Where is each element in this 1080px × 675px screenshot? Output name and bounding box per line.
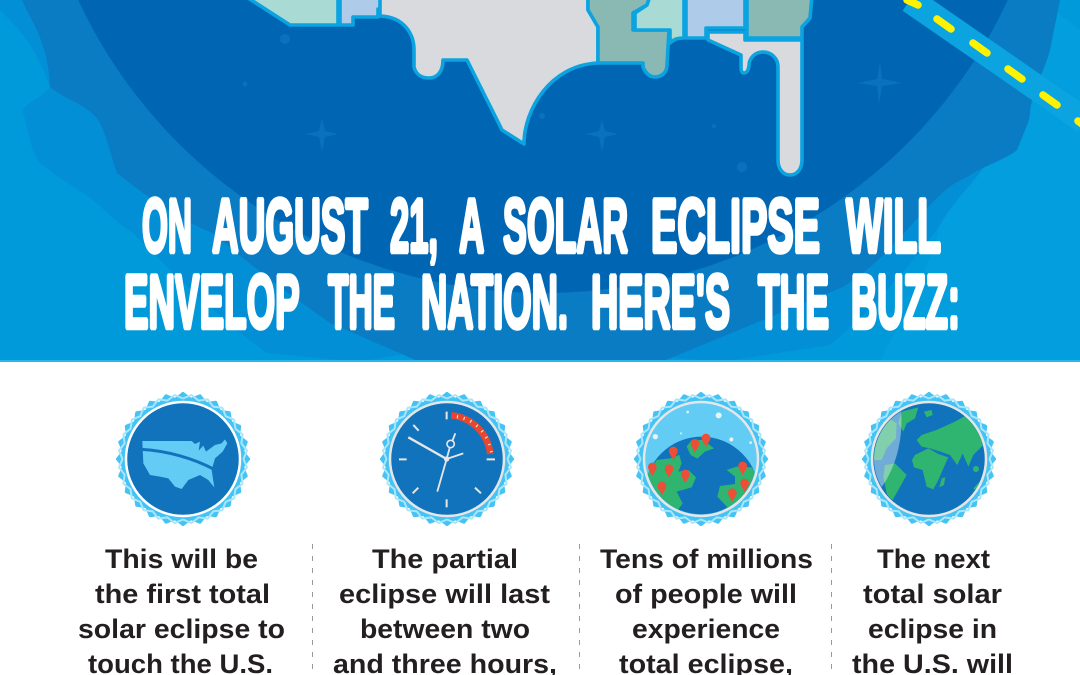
map of the United States [245,0,812,175]
hero panel: eclipse map background [0,0,1080,362]
dashed column dividers [312,544,832,675]
headline: 21, [390,184,438,269]
headline: SOLAR [503,184,628,269]
headline: HERE'S [591,260,730,345]
text column: first total eclipse: This will be [105,544,258,574]
headline: A [459,184,483,269]
text column: next total eclipse: eclipse in [868,614,997,644]
text column: partial eclipse duration: The partial [372,544,518,574]
headline: ON [142,184,192,269]
headline: THE [328,260,395,345]
headline: WILL [846,184,941,269]
text column: next total eclipse: total solar [863,579,1003,609]
text column: tens of millions of people: Tens of millions [600,544,813,574]
headline: NATION. [421,260,568,345]
icon: world globe badge [864,394,994,524]
headline: ENVELOP [124,260,299,345]
text column: next total eclipse: The next [877,544,990,574]
text column: first total eclipse: the first total [95,579,270,609]
text column: next total eclipse [852,544,1013,675]
text column: partial eclipse duration: between two [360,614,530,644]
text column: tens of millions of people: experience [632,614,780,644]
text column: partial eclipse duration [333,544,557,675]
icon: United States map badge [118,394,248,524]
eclipse path band with dashed line [907,0,1080,130]
text column: first total eclipse: solar eclipse to [78,614,285,644]
icon: globe with location pins badge [634,392,768,526]
headline: AUGUST [212,184,368,269]
hero panel: eclipse map background: BUZZ: [851,260,960,345]
text column: tens of millions of people [600,544,813,675]
text column: first total eclipse [78,544,285,675]
headline: ECLIPSE [651,184,820,269]
icon: clock badge [382,394,512,524]
text column: partial eclipse duration: eclipse will last [339,579,550,609]
headline [125,196,958,331]
headline: THE [758,260,829,345]
text column: tens of millions of people: of people will [615,579,797,609]
